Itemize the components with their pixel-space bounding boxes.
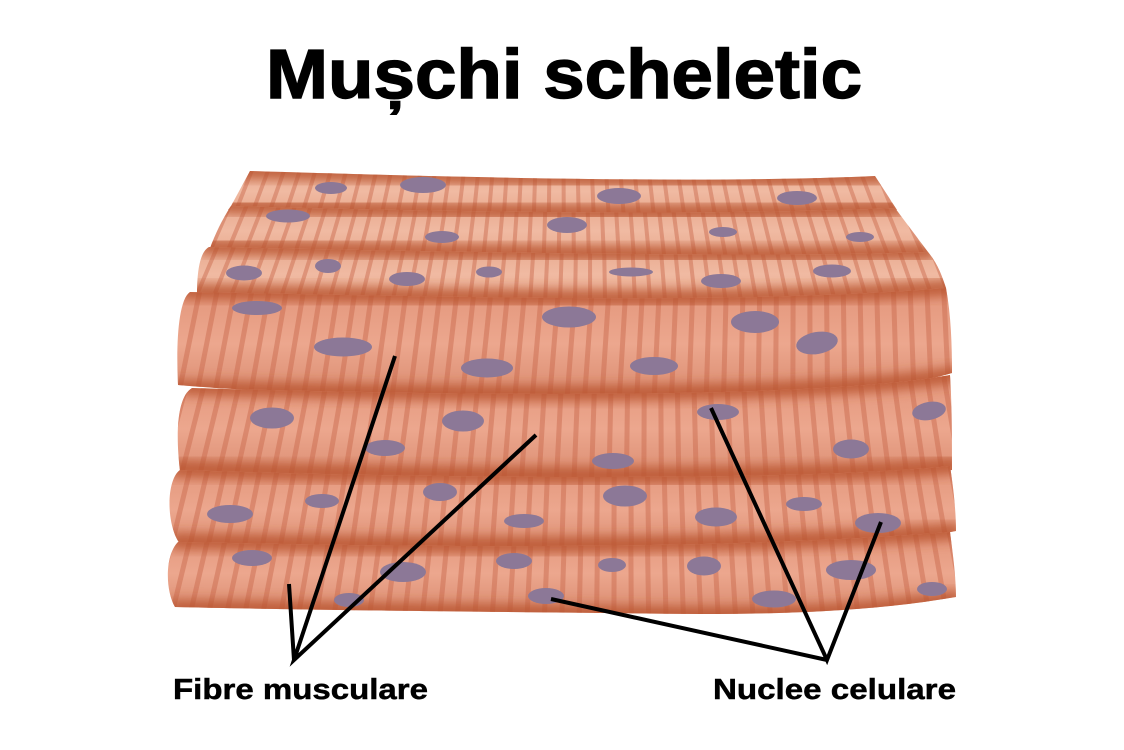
leader lines: muscle fibres [289, 356, 536, 660]
fibre row 7 [168, 532, 956, 614]
fibre row 5 [178, 375, 952, 477]
muscle fibre bundle [168, 171, 956, 614]
leader lines: cell nuclei [551, 408, 881, 660]
label: cell nuclei: Nuclee celulare [713, 674, 956, 706]
fibre row 1 [228, 171, 897, 212]
fibre row 4 [177, 288, 952, 394]
fibre row 6 [170, 466, 956, 546]
fibre row 3 [197, 247, 946, 298]
fibre row 2 [210, 206, 928, 254]
label: muscle fibres: Fibre musculare [173, 674, 428, 706]
title: Mușchi scheletic [266, 35, 862, 114]
